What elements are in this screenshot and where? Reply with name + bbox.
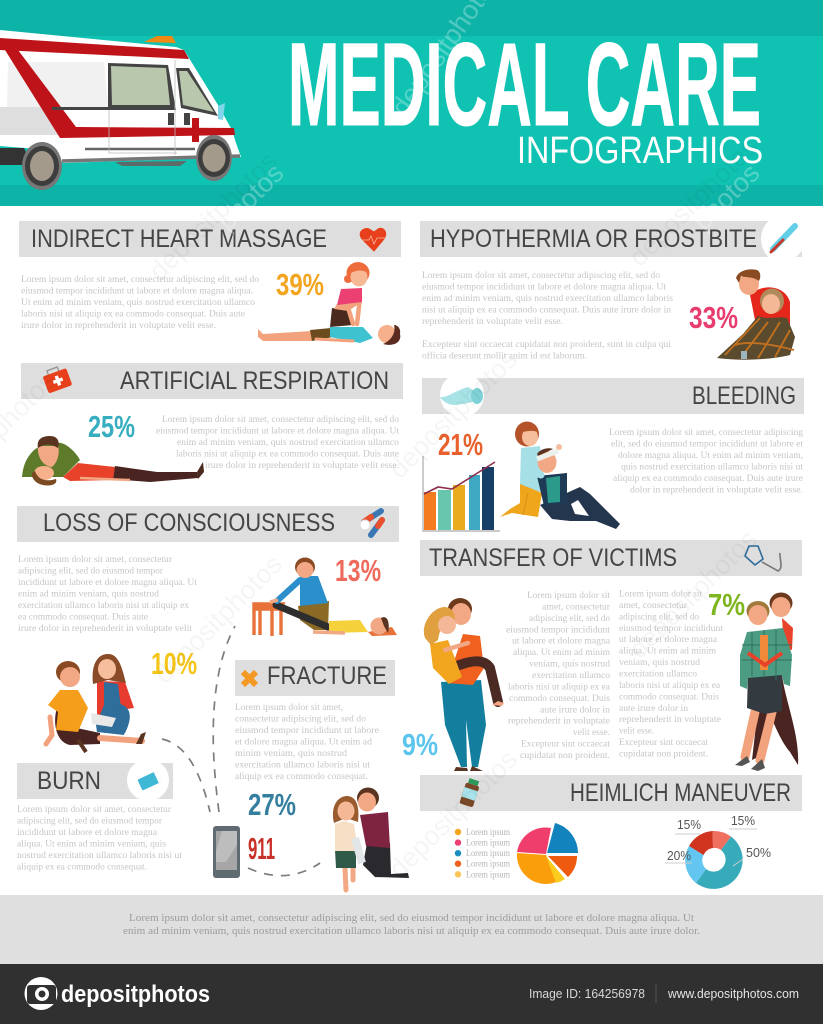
text column right: eiusmod tempor incididunt [619, 623, 723, 633]
text block: enim ad minim veniam, quis nostrud [18, 588, 159, 598]
bar chart [423, 456, 500, 531]
panel: header banner [0, 0, 823, 206]
subtitle: INFOGRAPHICS [517, 130, 763, 172]
text block: Lorem ipsum dolor sit amet, consectetur adipiscing elit, sed do [422, 270, 660, 280]
chart legend: Lorem ipsum [466, 838, 510, 848]
watermark overlay: depositphotos [623, 132, 763, 272]
icon: camera logo [24, 977, 58, 1010]
text block: laboris nisi ut aliquip ex ea commodo consequat. Duis aute [21, 308, 245, 318]
panel: indirect heart massage [19, 221, 401, 345]
text column right: cupidatat non proident. [619, 748, 708, 758]
donut chart: 15% [731, 813, 755, 828]
text block: aliquip ex ea commodo consequat. [235, 771, 368, 781]
watermark overlay: depositphotos [143, 146, 283, 286]
heading bar [420, 221, 802, 257]
text column left: velit esse. [573, 727, 610, 737]
text column left: eiusmod tempor incididunt [506, 624, 610, 634]
illustration: raising the legs [254, 558, 397, 636]
donut chart: 50% [746, 845, 771, 860]
icon: first aid kit [41, 364, 72, 394]
heading: BLEEDING [692, 382, 796, 410]
heading: ARTIFICIAL RESPIRATION [120, 367, 389, 395]
text block: quis nostrud exercitation ullamco laboris nisi ut [621, 462, 803, 472]
text block: eiusmod tempor incididunt ut labore et dolore magna aliqua. Ut [156, 426, 399, 436]
text block: officia deserunt mollit anim id est laborum. [422, 350, 587, 360]
heading: BURN [37, 767, 101, 795]
text block: Lorem ipsum dolor sit amet, [235, 702, 343, 712]
text block: laboris nisi ut aliquip ex ea commodo consequat. Duis aute [176, 448, 399, 458]
watermark overlay: depositphotos [623, 524, 763, 664]
text column right: adipiscing elit, sed do [619, 611, 699, 621]
text column left: commodo consequat. Duis [509, 693, 610, 703]
text column right: aliqua. Ut enim ad minim [619, 646, 716, 656]
stat: 25%: 25% [88, 409, 135, 444]
text column left: cupidatat non proident. [520, 750, 610, 760]
text column right: laboris nisi ut aliquip ex ea [619, 680, 720, 690]
illustration: ambulance [0, 30, 241, 190]
illustration: splinting a leg [333, 788, 409, 890]
text block: aliquip ex ea commodo consequat. [17, 862, 147, 872]
text block: nisi ut aliquip ex ea commodo consequat. Duis aute irure dolor in [422, 304, 671, 314]
watermark overlay: photos [211, 158, 290, 236]
text column left: laboris nisi ut aliquip ex ea [508, 681, 610, 691]
text block: Lorem ipsum dolor sit amet, consectetur adipiscing elit, sed do [21, 274, 259, 284]
watermark overlay: depositphotos [383, 744, 523, 884]
website: www.depositphotos.com [667, 987, 799, 1001]
text block: minim veniam, quis nostrud [235, 748, 347, 758]
panel: fracture [235, 660, 409, 890]
heading: HYPOTHERMIA OR FROSTBITE [430, 225, 757, 253]
panel: footer note: Lorem ipsum dolor sit amet, consectetur adipiscing elit, sed do eiusmod tempor incididunt ut labore et dolore magna aliqua. Ut [129, 913, 694, 924]
donut chart: 15% [677, 817, 701, 832]
text block: et dolore magna aliqua. Ut enim ad [235, 736, 372, 746]
heading bar [422, 378, 804, 414]
stat: 911: 911 [248, 831, 275, 866]
illustration: head bandaging [500, 422, 620, 529]
arrow: dashed route to fracture couple [248, 863, 320, 876]
icon: stethoscope [745, 546, 781, 571]
text column left: Excepteur sint occaecat [521, 739, 610, 749]
stat: 9%: 9% [402, 727, 438, 762]
callout: emergency phone 911 [162, 626, 320, 878]
text column right: Lorem ipsum dolor sit [619, 588, 702, 598]
badge circle [761, 214, 811, 264]
text column left: aute irure dolor in [540, 704, 610, 714]
badge circle [127, 759, 169, 801]
chart legend [455, 827, 510, 879]
stat: 7%: 7% [708, 587, 745, 622]
panel: hypothermia or frostbite [420, 214, 823, 360]
text block: eiusmod tempor incididunt ut labore [235, 725, 379, 735]
text block: dolore magna aliqua. Ut enim ad minim veniam, [618, 450, 803, 460]
text block: ea commodo consequat. Duis aute [18, 612, 148, 622]
text column right: ut labore et dolore magna [619, 634, 717, 644]
text column right: reprehenderit in voluptate [619, 714, 721, 724]
text block: consectetur adipiscing elit, sed do [235, 714, 366, 724]
text column left: ut labore et dolore magna [512, 636, 610, 646]
text block: enim ad minim veniam, quis nostrud exercitation ullamco [177, 437, 399, 447]
text column left: reprehenderit in voluptate [508, 716, 610, 726]
stat: 33%: 33% [689, 300, 738, 335]
text block [235, 702, 379, 781]
donut chart: 20% [667, 848, 691, 863]
icon: bandage roll [440, 387, 483, 405]
pie chart [517, 823, 578, 884]
text column right: exercitation ullamco [619, 668, 697, 678]
text block [422, 270, 673, 360]
icon: heart [360, 228, 386, 251]
text column left: adipiscing elit, sed do [529, 613, 610, 623]
text block: irure dolor in reprehenderit in voluptate velit [18, 623, 192, 633]
panel: artificial respiration [21, 363, 403, 485]
heading: TRANSFER OF VICTIMS [429, 544, 677, 572]
chart legend: Lorem ipsum [466, 848, 510, 858]
icon: thermometer [771, 226, 795, 252]
heading: LOSS OF CONSCIOUSNESS [43, 509, 335, 537]
text column right [619, 588, 723, 758]
illustration: carrying a victim [424, 598, 504, 771]
text column right: velit esse. [619, 726, 654, 736]
heading: FRACTURE [267, 662, 387, 690]
text block [156, 414, 399, 470]
text column left: amet, consectetur [542, 601, 610, 611]
panel: footer note: enim ad minim veniam, quis nostrud exercitation ullamco laboris nisi ut aliquip ex ea commodo consequat. Duis aute irure dolor. [123, 926, 700, 937]
illustration: warming a victim with a blanket [717, 269, 795, 360]
text block: incididunt ut labore et dolore magna aliqua. Ut [18, 577, 197, 587]
illustration: seated couple [46, 654, 146, 752]
donut chart [665, 813, 771, 889]
panel: footer note [0, 895, 823, 964]
text block: dolor in reprehenderit in voluptate velit esse. [630, 484, 803, 494]
text block: elit, sed do eiusmod tempor incididunt ut labore et [611, 438, 803, 448]
panel: stock photo bar [0, 964, 823, 1024]
panel: burn [17, 759, 182, 872]
panel: heimlich maneuver [420, 592, 802, 889]
text block: irure dolor in reprehenderit in voluptate velit esse. [21, 320, 216, 330]
stat: 13%: 13% [335, 553, 381, 588]
heading bar [21, 363, 403, 399]
text block: aliqua. Ut enim ad minim veniam, quis [17, 838, 166, 848]
text block: Excepteur sint occaecat cupidatat non proident, sunt in culpa qui [422, 339, 671, 349]
watermark overlay: depositphotos [148, 549, 288, 689]
arrow: dashed route to raised legs [213, 626, 235, 812]
text column left [506, 590, 610, 760]
image id: Image ID: 164256978 [529, 987, 645, 1001]
badge circle [440, 373, 484, 417]
stat: 27%: 27% [248, 787, 296, 822]
heading bar [17, 763, 173, 799]
stat: 10%: 10% [151, 646, 197, 681]
stat: 39%: 39% [276, 267, 324, 302]
heading bar [235, 660, 395, 696]
text column right: veniam, quis nostrud [619, 657, 700, 667]
icon: pills [360, 511, 382, 535]
heading: INDIRECT HEART MASSAGE [31, 225, 327, 253]
text block [18, 554, 197, 633]
stat: 21%: 21% [438, 427, 483, 462]
text block [17, 804, 182, 872]
logo wordmark: depositphotos [61, 981, 210, 1008]
text block: Lorem ipsum dolor sit amet, consectetur adipiscing [609, 427, 803, 437]
text column left: Lorem ipsum dolor sit [527, 590, 610, 600]
arrow: dashed route from burn couple [162, 739, 210, 812]
watermark overlay: depositphotos [383, 344, 523, 484]
text block [21, 274, 259, 330]
icon: plaster [137, 771, 162, 791]
text block: eiusmod tempor incididunt ut labore et dolore magna aliqua. Ut [422, 282, 666, 292]
icon: orange cross [243, 672, 256, 685]
heading bar [19, 221, 401, 257]
text block: Ut enim ad minim veniam, quis nostrud exercitation ullamco [21, 297, 255, 307]
text block: aliquip ex ea commodo consequat. Duis aute irure [613, 473, 803, 483]
chart legend: Lorem ipsum [466, 827, 510, 837]
chart legend: Lorem ipsum [466, 859, 510, 869]
chart legend: Lorem ipsum [466, 869, 510, 879]
text column right: commodo consequat. Duis [619, 691, 719, 701]
watermark overlay: photos [687, 158, 766, 236]
text block: exercitation ullamco laboris nisi ut aliquip ex [18, 600, 189, 610]
text block: exercitation ullamco laboris nisi ut [235, 760, 370, 770]
icon: medicine bottle [459, 778, 481, 808]
panel: transfer of victims [402, 540, 802, 771]
text column left: aliqua. Ut enim ad minim [513, 647, 610, 657]
text block: Lorem ipsum dolor sit amet, consectetur [18, 554, 172, 564]
text column right: aute irure dolor in [619, 703, 688, 713]
heading bar [420, 775, 802, 811]
text block: adipiscing elit, sed do eiusmod tempor [17, 816, 162, 826]
text block: reprehenderit in voluptate velit esse. [422, 316, 563, 326]
text column right: amet, consectetur [619, 600, 687, 610]
icon: smartphone [213, 826, 240, 878]
text column right: Excepteur sint occaecat [619, 737, 708, 747]
text block: eiusmod tempor incididunt ut labore et dolore magna aliqua. [21, 286, 253, 296]
illustration: CPR [258, 262, 400, 345]
panel: loss of consciousness [17, 506, 399, 752]
text block [609, 427, 803, 494]
text block: enim ad minim veniam, quis nostrud exercitation ullamco laboris [422, 293, 673, 303]
text block: Lorem ipsum dolor sit amet, consectetur adipiscing elit, sed do [162, 414, 399, 424]
text block: incididunt ut labore et dolore magna [17, 827, 157, 837]
text column left: veniam, quis nostrud [529, 659, 610, 669]
illustration: heimlich maneuver [735, 592, 798, 771]
text block: nostrud exercitation ullamco laboris nisi ut [17, 850, 182, 860]
panel: bleeding [422, 373, 804, 531]
text column left: exercitation ullamco [532, 670, 610, 680]
illustration: mouth to mouth [22, 436, 204, 485]
heading bar [420, 540, 802, 576]
text block: adipiscing elit, sed do eiusmod tempor [18, 566, 163, 576]
text block: Lorem ipsum dolor sit amet, consectetur [17, 804, 171, 814]
text block: irure dolor in reprehenderit in voluptate velit esse. [205, 460, 399, 470]
heading bar [17, 506, 399, 542]
